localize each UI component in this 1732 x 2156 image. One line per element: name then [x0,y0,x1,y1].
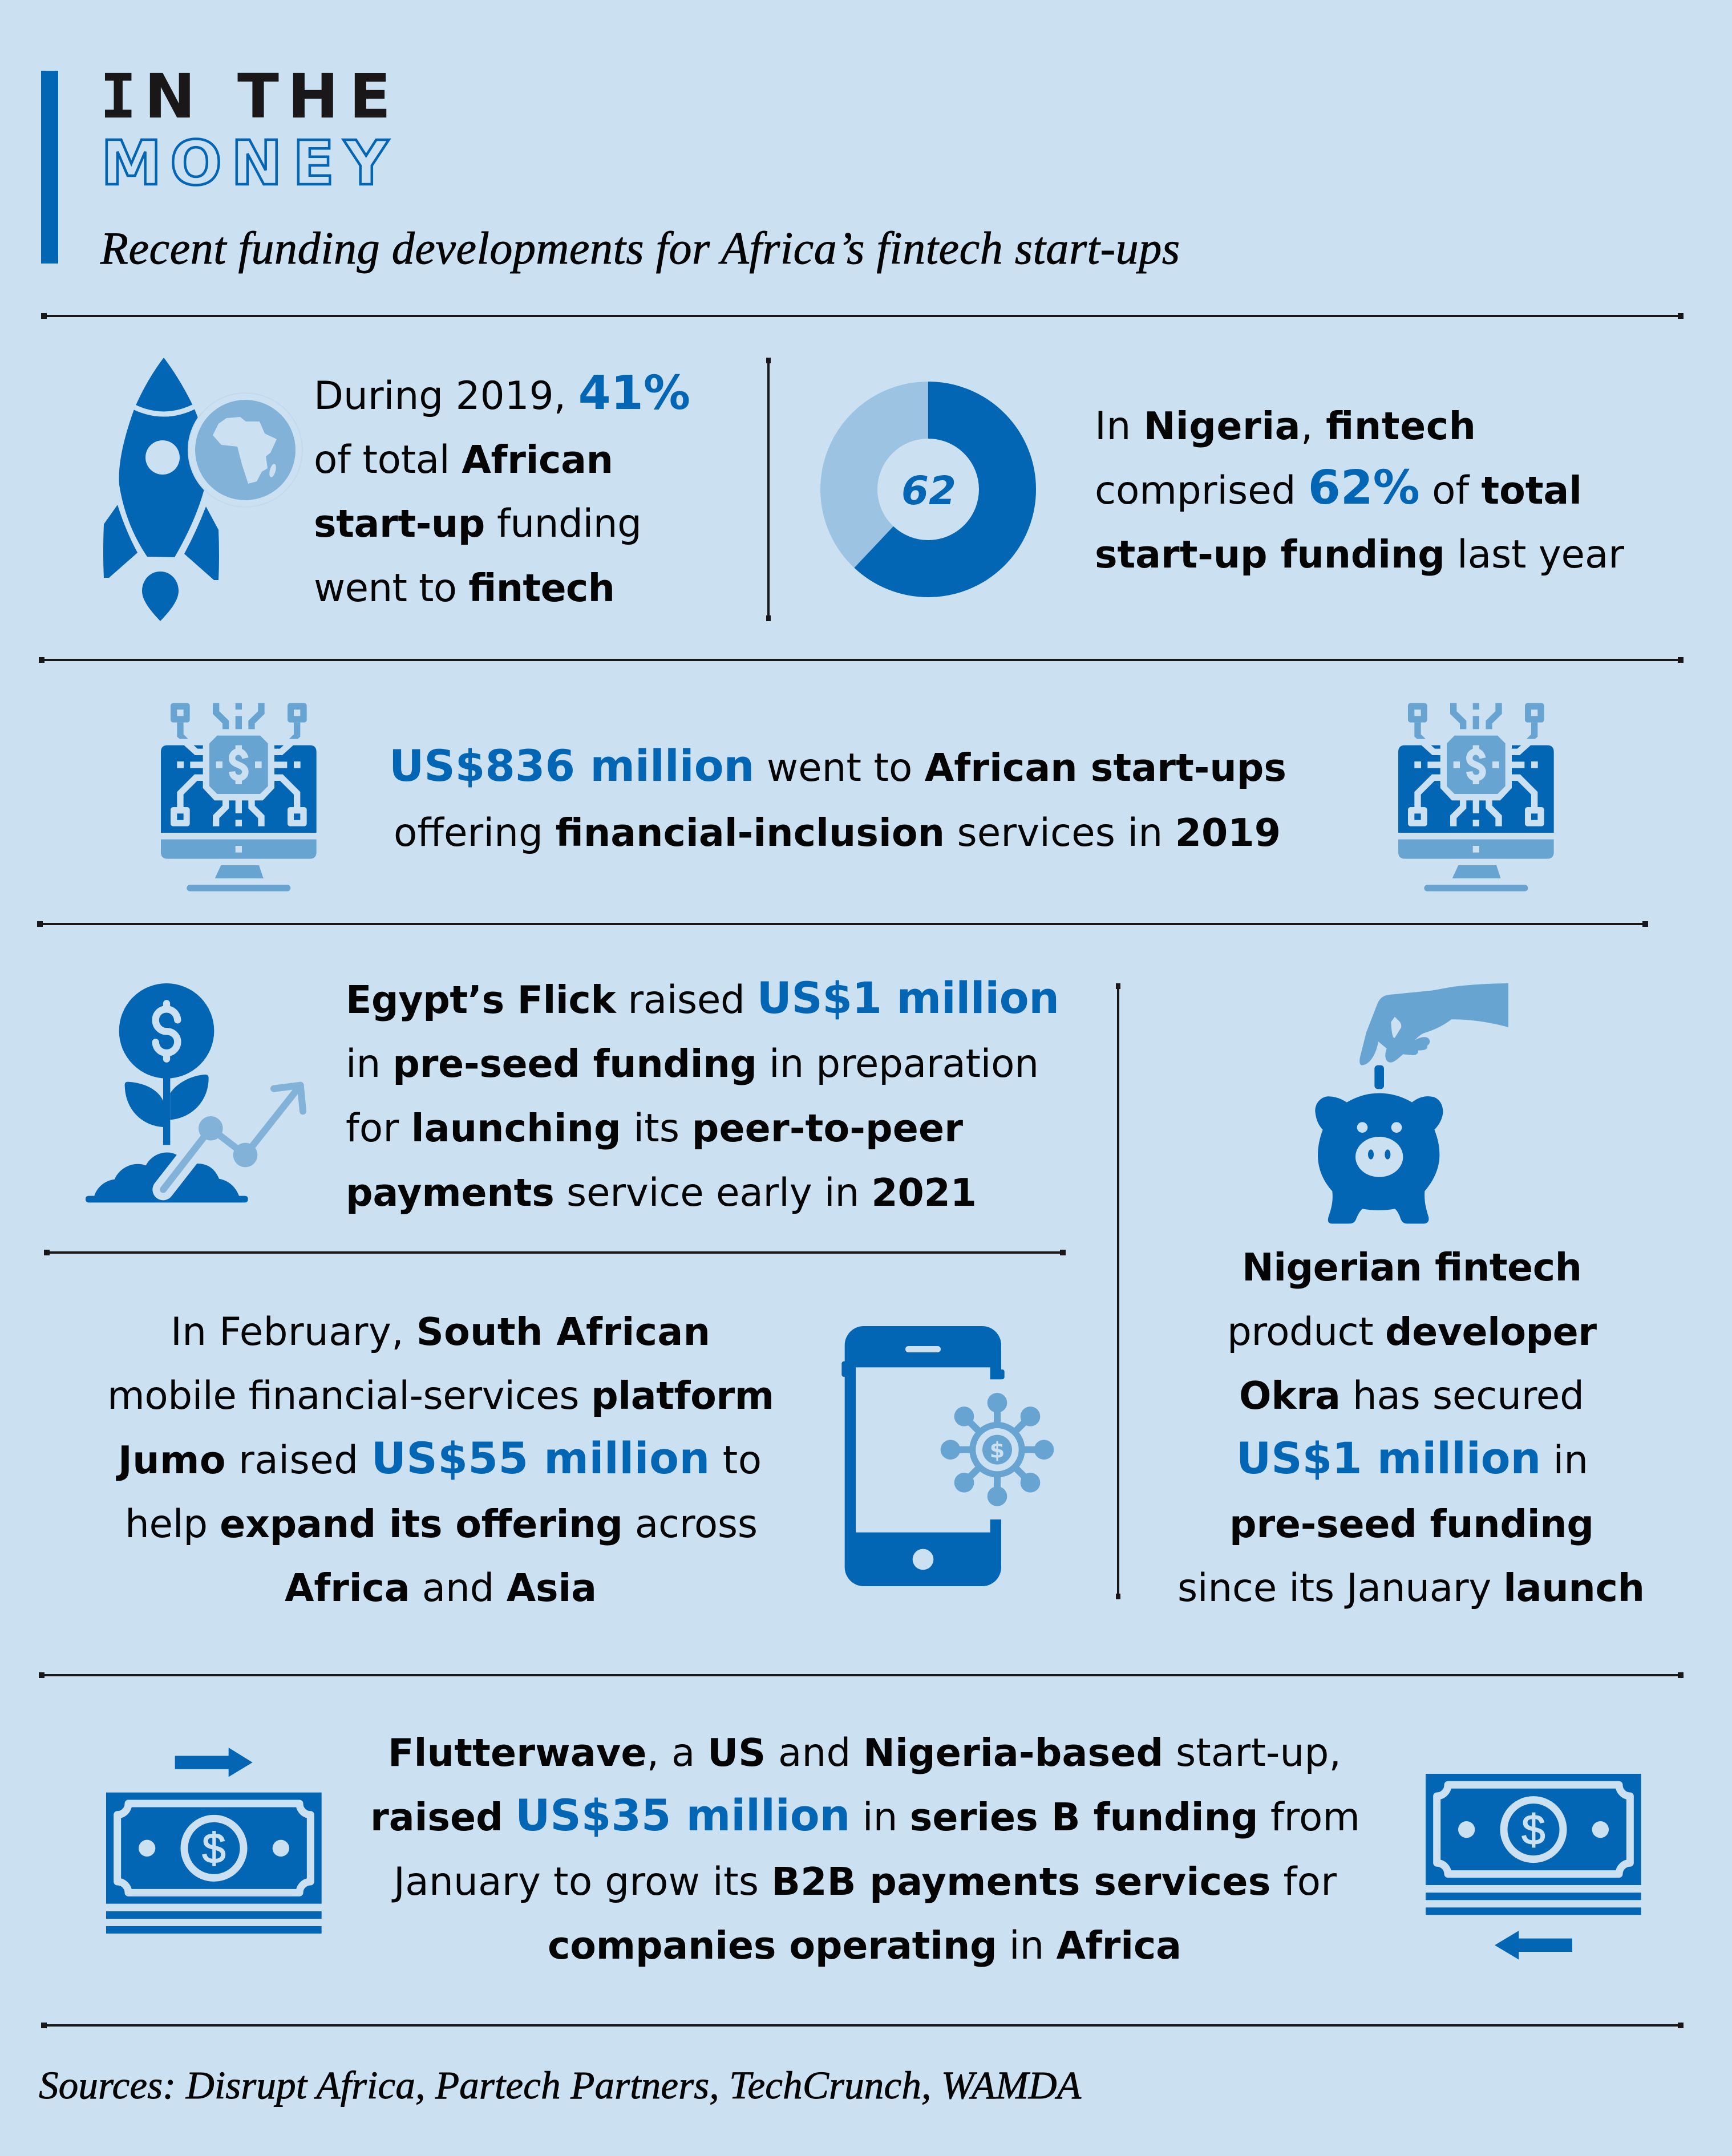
text: Nigeria 62%: comprised 62% of total [1095,461,1582,515]
text: 41% of start-up funding: start-up funding [314,501,642,546]
text: US$836 million: US$836 million went to African start-ups [389,741,1286,791]
text: Egypt's Flick: in pre-seed funding in preparation [346,1041,1039,1086]
text: Nigeria 62%: start-up funding last year [1095,532,1624,577]
text: Nigeria 62% [1095,403,1624,577]
icon: rocket with globe [103,358,302,621]
text: Egypt's Flick: Egypt’s Flick raised US$1 million [346,973,1059,1023]
text: 41% of start-up funding: went to fintech [314,565,615,610]
icon: monitor chip left [161,703,317,891]
text: Okra: product developer [1227,1309,1597,1354]
text: Jumo: Jumo raised US$55 million to [116,1433,762,1484]
text: Okra: Nigerian fintech [1242,1245,1582,1290]
text: Flutterwave: raised US$35 million in series B funding from [370,1790,1360,1841]
title: IN THE: IN THE [0,62,391,132]
sources: Sources: Disrupt Africa, Partech Partners, TechCrunch, WAMDA [39,2064,1082,2107]
title: MONEY outlined: MONEY [101,128,389,199]
text: Jumo: help expand its offering across [125,1501,758,1546]
text: Egypt's Flick [346,973,1059,1215]
text: 41% of start-up funding [314,366,690,610]
icon: piggy bank and hand [1315,983,1508,1223]
text: Jumo: Africa and Asia [285,1565,597,1610]
text: 41% of start-up funding: During 2019, 41% [314,366,690,420]
text: US$836 million [389,741,1286,855]
icon: money plant with growth arrow [86,983,303,1202]
title accent bar [41,71,58,264]
text: Nigeria 62%: In Nigeria, fintech [1095,403,1476,448]
icon: smartphone with network: $ [990,1438,1005,1464]
subtitle: Recent funding developments for Africa’s fintech start-ups [100,224,1180,274]
text: Okra: US$1 million in [1236,1433,1588,1484]
donut chart: 62% [849,410,1007,569]
text: Egypt's Flick: for launching its peer-to-peer [346,1105,963,1150]
text: Jumo: In February, South African [171,1309,710,1354]
text: US$836 million: offering financial-inclusion services in 2019 [394,810,1281,855]
icon: banknote with left arrow [1426,1774,1641,1960]
text: Flutterwave: Flutterwave, a US and Nigeria-based start-up, [388,1730,1341,1775]
icon: banknote with right arrow [106,1748,322,1934]
text: Okra [1177,1245,1645,1610]
donut chart: 62%: 62 [901,468,956,514]
icon: smartphone with network [841,1326,1054,1586]
text: Flutterwave: companies operating in Africa [548,1923,1181,1968]
text: Jumo: mobile financial-services platform [107,1373,774,1418]
text: Egypt's Flick: payments service early in 2021 [346,1170,977,1215]
text: Okra: pre-seed funding [1229,1502,1594,1546]
text: Jumo [107,1309,774,1610]
text: Flutterwave [370,1730,1360,1968]
text: Flutterwave: January to grow its B2B payments services for [391,1859,1337,1904]
text: 41% of start-up funding: of total African [314,437,613,482]
text: Okra: Okra has secured [1239,1373,1584,1418]
text: Okra: since its January launch [1177,1565,1645,1610]
icon: monitor chip right [1398,703,1554,891]
